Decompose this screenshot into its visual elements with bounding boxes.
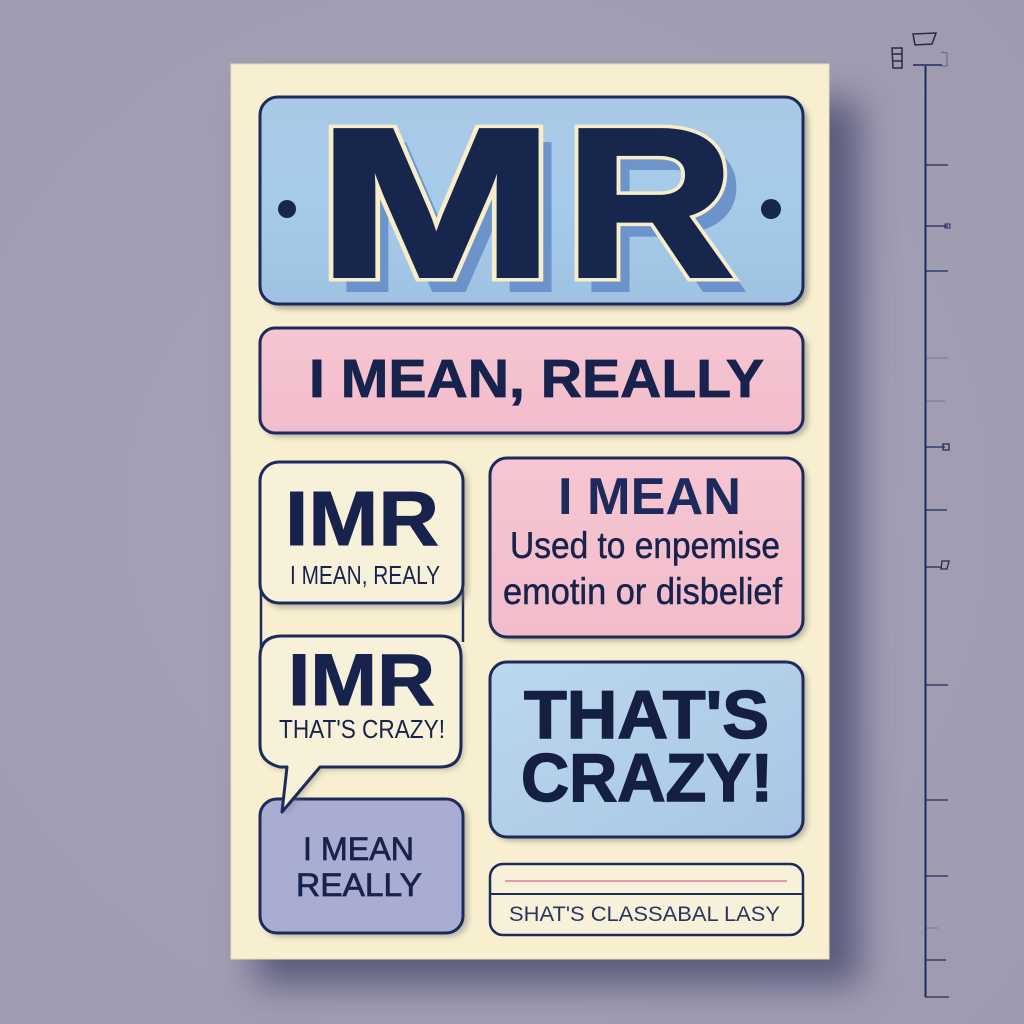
icon: right rivet (761, 199, 781, 219)
title letter shadows: R (578, 98, 747, 335)
icon: left ruler mark (892, 48, 902, 68)
panel: IMR card one (260, 462, 468, 608)
tick mark at 567 (941, 561, 949, 569)
title letter shadows: M (330, 98, 568, 335)
icon: top ruler mark (913, 33, 936, 45)
bubble heading: IMR (288, 640, 435, 721)
panel: I mean definition (490, 458, 807, 641)
panel: purple card (260, 799, 468, 937)
purple card text (296, 831, 422, 903)
banner text: I MEAN, REALLY (309, 349, 764, 409)
panel: MR title plate (260, 84, 808, 335)
definition heading: I MEAN (558, 468, 741, 526)
title: MR cream outline (317, 84, 734, 321)
title: MR cream outline: M (317, 84, 555, 321)
definition text: emotin or disbelief (503, 571, 783, 612)
card heading: IMR (285, 476, 439, 562)
strip caption: SHAT'S CLASSABAL LASY (509, 903, 780, 926)
tick mark at 447 (943, 444, 949, 450)
crazy text (521, 677, 773, 816)
strip divider (490, 893, 803, 895)
icon: left rivet (278, 200, 296, 218)
definition text: Used to enpemise (510, 525, 780, 566)
panel: I mean, really banner (260, 328, 808, 437)
panel: classical strip (490, 864, 803, 935)
title: MR: R (565, 84, 734, 321)
pink rule (505, 880, 787, 882)
bubble caption: THAT'S CRAZY! (279, 714, 445, 744)
ruler at right (892, 33, 950, 997)
panel: speech bubble (260, 636, 464, 815)
tick mark at 226 (945, 224, 950, 228)
title: MR (317, 84, 734, 321)
title: MR cream outline: R (565, 84, 734, 321)
title: MR: M (317, 84, 555, 321)
purple card text: REALLY (296, 867, 422, 903)
poster shadow (255, 100, 860, 985)
connector lines between cards (261, 590, 463, 650)
definition text (503, 525, 783, 612)
crazy text: CRAZY! (521, 740, 773, 816)
crazy text: THAT'S (524, 677, 769, 753)
purple card text: I MEAN (303, 831, 414, 867)
title letter shadows (330, 98, 747, 335)
poster panel (231, 64, 829, 959)
panel: That's crazy (490, 662, 807, 841)
card caption: I MEAN, REALY (290, 560, 440, 590)
icon: right ruler mark (941, 52, 947, 66)
